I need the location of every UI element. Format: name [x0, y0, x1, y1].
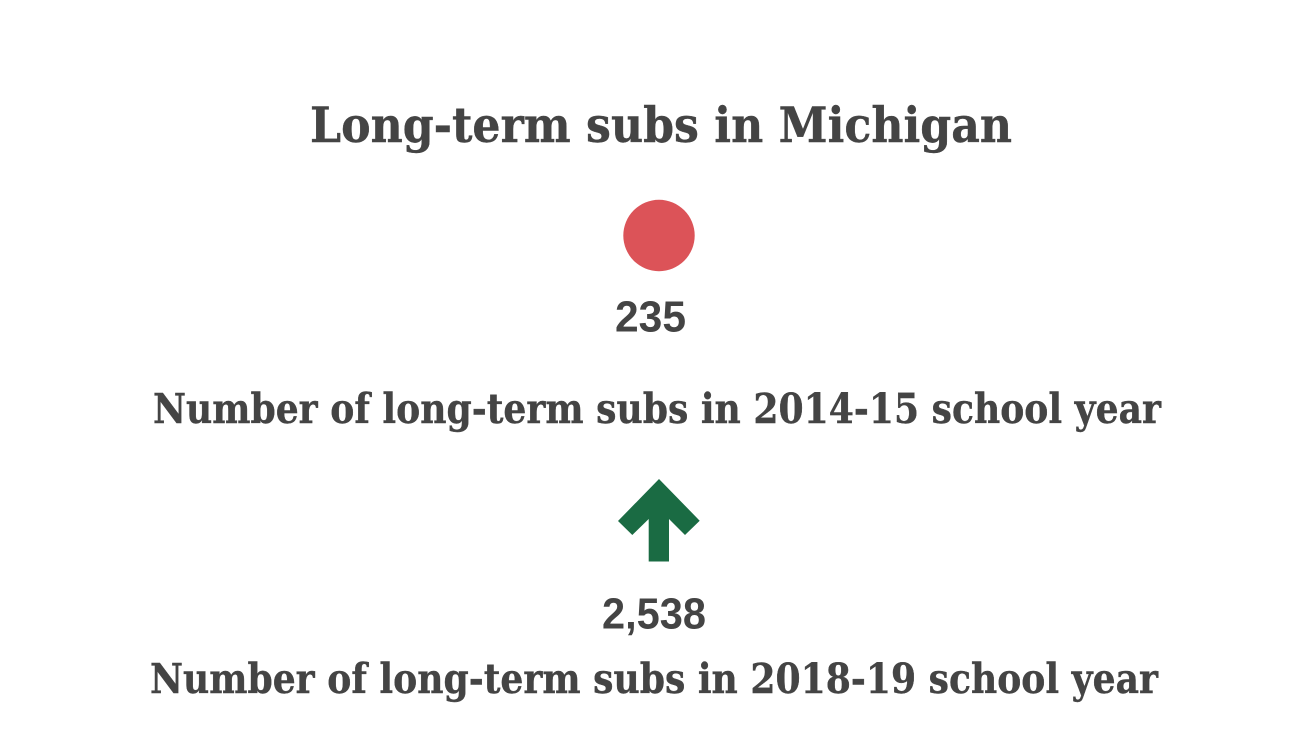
icon: green up arrow: [618, 479, 700, 562]
label: 2014-15 school year: Number of long-term subs in 2014-15 school year: [153, 384, 1162, 433]
title: Long-term subs in Michigan: [310, 96, 1012, 154]
icon: red circle: [623, 200, 695, 271]
label: 2018-19 school year: Number of long-term subs in 2018-19 school year: [150, 654, 1159, 703]
value: 2018-19 count: 2,538: [602, 590, 706, 638]
value: 2014-15 count: 235: [615, 292, 686, 342]
